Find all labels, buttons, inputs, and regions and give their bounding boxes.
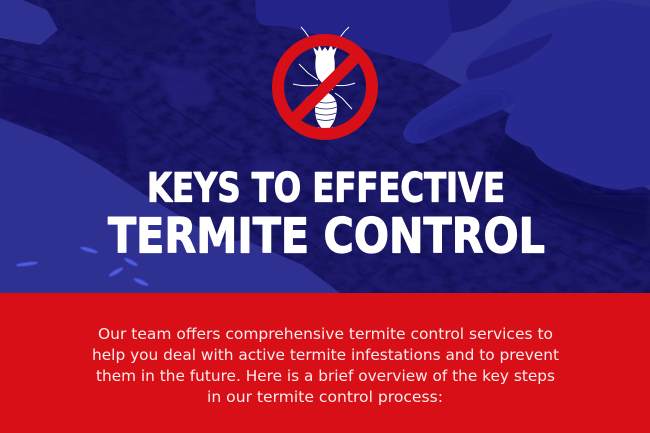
intro paragraph bbox=[92, 325, 559, 406]
panel: red intro band bbox=[0, 293, 650, 433]
intro paragraph: Our team offers comprehensive termite control services to bbox=[98, 325, 553, 343]
panel: blue photo background bbox=[0, 0, 650, 293]
rotting wood log bbox=[0, 0, 650, 293]
termite silhouette bbox=[313, 44, 337, 131]
upper gloved hand bbox=[255, 0, 512, 65]
lower gloved hand pointing bbox=[403, 0, 650, 190]
intro paragraph: help you deal with active termite infestations and to prevent bbox=[92, 346, 559, 364]
prohibition ring and slash bbox=[278, 40, 372, 134]
title: TERMITE CONTROL bbox=[108, 208, 545, 264]
title bbox=[108, 166, 545, 264]
intro paragraph: in our termite control process: bbox=[207, 388, 443, 406]
crawling termites bbox=[16, 246, 149, 287]
title: KEYS TO EFFECTIVE bbox=[147, 166, 505, 212]
icon: no termites sign bbox=[278, 27, 372, 134]
intro paragraph: them in the future. Here is a brief overview of the key steps bbox=[96, 367, 555, 385]
